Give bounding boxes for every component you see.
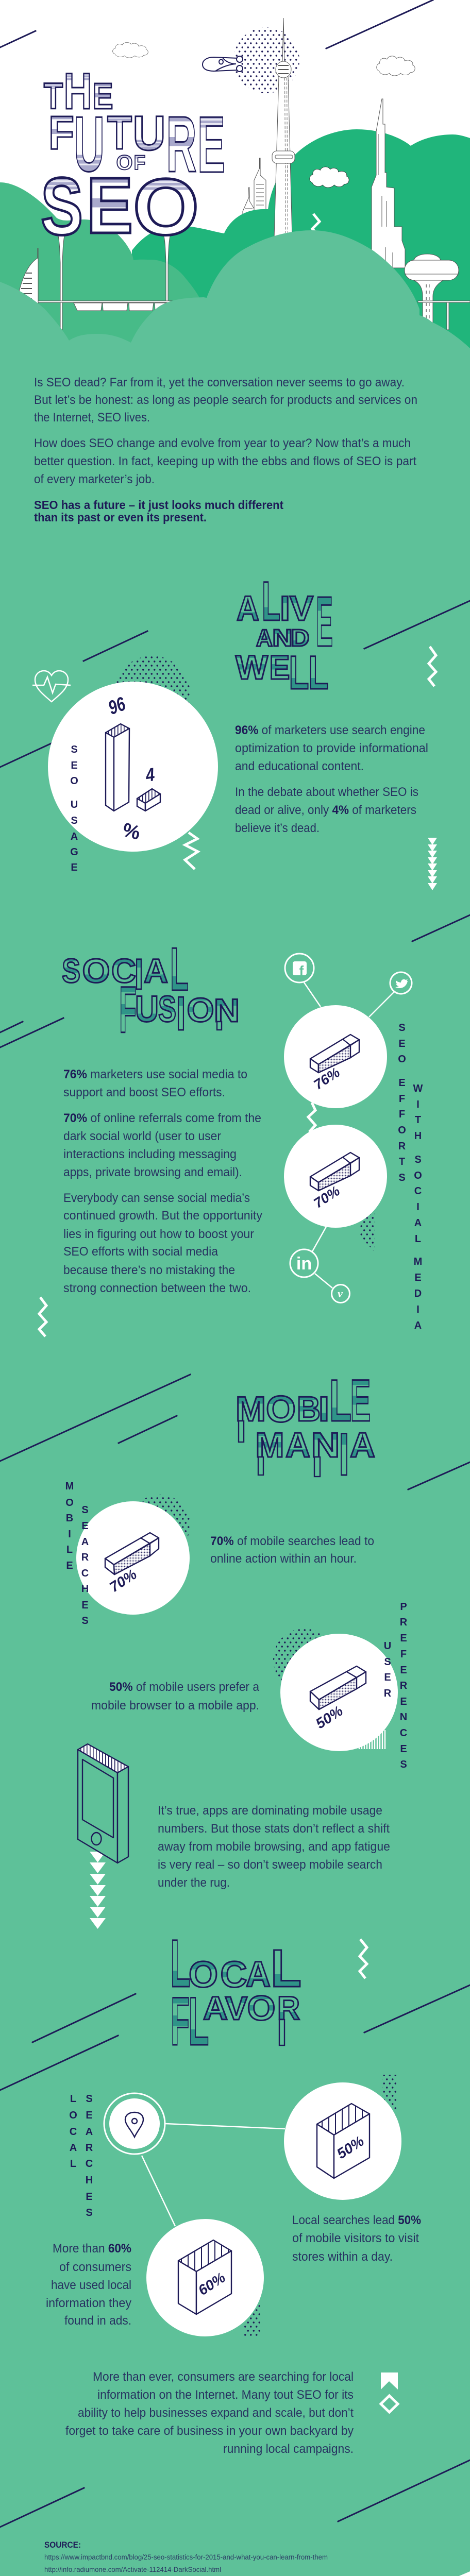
text: local 60 — [46, 2242, 131, 2328]
heading: mobile mania — [236, 1368, 375, 1488]
sources: https://www.impactbnd.com/blog/25-seo-statistics-for-2015-and-what-you-can-learn-from-them — [44, 2553, 328, 2561]
heading: alive and well: N — [272, 624, 293, 651]
heading: local flavor — [170, 1925, 301, 2060]
intro text: How does SEO change and evolve from year to year? Now that’s a much — [34, 436, 411, 450]
heading: mobile mania: B — [297, 1389, 321, 1429]
text: local closing — [65, 2370, 354, 2456]
icon: white cloud — [310, 167, 349, 188]
icon: facebook — [285, 954, 314, 982]
text: alive and well: and educational content. — [235, 759, 364, 773]
value 60%: 60% — [195, 2269, 228, 2298]
triangles — [90, 1852, 106, 1929]
heading: social fusion: S — [62, 952, 80, 990]
intro text: better question. In fact, keeping up with the ebbs and flows of SEO is part — [34, 454, 416, 468]
title: T — [107, 107, 132, 159]
intro text: But let’s be honest: as long as people search for products and services on — [34, 393, 417, 407]
icon: bag — [178, 2240, 231, 2314]
text: local closing: running local campaigns. — [223, 2442, 354, 2456]
hero sky lines — [0, 0, 470, 178]
text: mobile users: mobile browser to a mobile app. — [91, 1699, 259, 1713]
text: social: apps, private browsing and email). — [63, 1165, 242, 1179]
heading: mobile mania: E — [350, 1368, 371, 1434]
heading: local flavor: F — [171, 1984, 190, 2060]
text: local 50: stores within a day. — [292, 2250, 393, 2264]
number 4: 4 — [144, 764, 156, 786]
skyscraper — [372, 99, 405, 268]
zigzag — [429, 647, 436, 686]
dark green hills — [132, 129, 470, 371]
icon: vimeo: v — [338, 1287, 343, 1300]
text: social: strong connection between the two. — [63, 1281, 251, 1295]
value 76%: 76% — [311, 1064, 343, 1093]
text: local closing: information on the Internet. Many tout SEO for its — [97, 2388, 354, 2402]
heading: alive and well: D — [291, 624, 309, 651]
heading: local flavor: A — [203, 1990, 228, 2027]
heading: local flavor: R — [277, 1990, 300, 2027]
text: mobile users — [91, 1680, 260, 1713]
tower — [272, 18, 295, 238]
title: E — [197, 100, 225, 189]
heading: local flavor: A — [246, 1954, 271, 1994]
poles and bridge — [36, 233, 470, 330]
value 70%: 70% — [107, 1566, 140, 1595]
icon: box 50 — [310, 1666, 366, 1709]
heading: mobile mania: M — [236, 1389, 266, 1429]
heading: local flavor: O — [247, 1989, 275, 2028]
intro text: the Internet, SEO lives. — [34, 411, 150, 425]
icon: linkedin: in — [296, 1254, 312, 1274]
heading: alive and well: L — [289, 647, 309, 699]
dot pattern — [129, 1495, 190, 1555]
icon: facebook: f — [299, 963, 304, 978]
heading: alive and well: L — [262, 570, 280, 632]
decorative stripes — [359, 1730, 385, 1749]
title: E — [87, 161, 133, 250]
section lines: mobile — [0, 1375, 470, 1489]
connector lines — [304, 982, 394, 1288]
heading: social fusion — [62, 935, 240, 1047]
title: U — [133, 106, 166, 161]
zigzag — [312, 214, 320, 251]
saucer building — [405, 254, 459, 330]
icon: location pin — [104, 2093, 165, 2154]
value 50%: 50% — [313, 1703, 346, 1732]
chart: short bar 4 — [137, 789, 160, 811]
text: social: SEO efforts with social media — [63, 1245, 219, 1259]
heading: social fusion: F — [119, 973, 137, 1047]
text: alive and well: In the debate about whether SEO is — [235, 785, 418, 799]
section lines: social — [0, 1018, 63, 1047]
zigzag — [39, 1297, 46, 1336]
text: local closing: More than ever, consumers are searching for local — [93, 2370, 354, 2384]
label: SEO usage: SEO USAGE — [70, 744, 78, 873]
text: social: because there’s no mistaking the — [63, 1263, 235, 1277]
heading: mobile mania: I — [339, 1420, 349, 1488]
heading: social fusion: A — [144, 952, 168, 990]
zigzag — [185, 833, 198, 869]
label: searches: SEARCHES — [86, 2093, 93, 2218]
text: local 60: found in ads. — [64, 2314, 131, 2328]
intro text: than its past or even its present. — [34, 511, 207, 524]
icon: box 70 — [310, 1153, 359, 1191]
heading: alive and well: V — [290, 589, 313, 628]
heading: alive and well: W — [236, 648, 268, 686]
text: local 50: Local searches lead 50% — [292, 2213, 421, 2227]
text: local closing: ability to help businesses expand and scale, but don’t — [78, 2406, 354, 2420]
text: social: support and boost SEO efforts. — [63, 1086, 225, 1099]
icon: heart pulse — [32, 671, 71, 702]
dot pattern circle — [114, 656, 190, 732]
heading: social fusion: U — [135, 989, 159, 1030]
title: F — [134, 151, 145, 174]
text: alive and well: dead or alive, only 4% of marketers — [235, 803, 416, 817]
heading: social fusion: I — [176, 987, 186, 1040]
text: local 50 — [292, 2213, 421, 2264]
text: alive and well — [235, 723, 428, 835]
number 96: 96 — [106, 693, 129, 719]
text: mobile users: 50% of mobile users prefer a — [109, 1680, 260, 1694]
text: mobile searches — [210, 1534, 374, 1566]
heading: alive and well: I — [280, 589, 290, 628]
text: alive and well: 96% of marketers use search engine — [235, 723, 425, 737]
text: local 60: information they — [46, 2296, 131, 2310]
section lines: footer — [0, 2460, 470, 2527]
value 50%: 50% — [334, 2133, 367, 2162]
sources: http://info.radiumone.com/Activate-112414-DarkSocial.html — [44, 2566, 221, 2573]
text: social: 76% marketers use social media to — [63, 1067, 247, 1081]
infographic canvas: E — [316, 582, 333, 662]
title — [41, 62, 225, 252]
dot pattern — [382, 2075, 397, 2116]
title: F — [48, 107, 74, 159]
section lines: alive and well — [0, 601, 470, 941]
title: R — [166, 100, 197, 189]
title: O — [133, 162, 199, 251]
value 70%: 70% — [311, 1183, 343, 1211]
text: local 50: of mobile visitors to visit — [292, 2231, 419, 2245]
heading: mobile mania: M — [256, 1426, 284, 1465]
panel: 60% circle — [146, 2219, 264, 2336]
text: mobile searches: 70% of mobile searches lead to — [210, 1534, 374, 1548]
panel: mobile searches circle — [76, 1501, 190, 1615]
text: local 60: of consumers — [59, 2260, 131, 2274]
intro text: SEO has a future – it just looks much different — [34, 498, 283, 512]
icon: box 76 — [310, 1035, 359, 1073]
small skyline towers — [243, 158, 266, 216]
label: with social media: WITH SOCIAL MEDIA — [413, 1083, 423, 1331]
text: mobile apps: It’s true, apps are dominating mobile usage — [158, 1804, 382, 1818]
icon: phone — [78, 1744, 128, 1863]
intro text: Is SEO dead? Far from it, yet the conversation never seems to go away. — [34, 376, 405, 389]
heading: social fusion: L — [170, 935, 189, 1004]
heading: alive and well: A — [237, 589, 259, 628]
label: searches: SEARCHES — [81, 1504, 89, 1626]
text: mobile apps: under the rug. — [158, 1876, 230, 1890]
text: social: dark social world (user to user — [63, 1129, 221, 1143]
heading: local flavor: L — [170, 1925, 191, 2001]
left sail tower — [17, 248, 38, 309]
label: local: LOCAL — [69, 2093, 77, 2170]
dot pattern — [273, 1629, 335, 1690]
heading: local flavor: L — [189, 1984, 209, 2060]
icon: box 70 — [105, 1533, 159, 1574]
title: U — [74, 100, 105, 188]
heading: social fusion: S — [158, 989, 176, 1030]
heading: alive and well — [236, 570, 333, 699]
heading: social fusion: C — [111, 952, 136, 990]
heading: mobile mania: O — [266, 1389, 296, 1430]
title: E — [93, 76, 113, 117]
text: social: interactions including messaging — [63, 1147, 237, 1161]
text: social: Everybody can sense social media’s — [63, 1191, 250, 1205]
zigzag — [360, 1939, 367, 1978]
panel: 50% circle — [284, 2082, 401, 2200]
text: local 60: have used local — [51, 2278, 131, 2292]
text: alive and well: optimization to provide informational — [235, 741, 428, 755]
panel: 70% circle — [284, 1125, 387, 1228]
heading: social fusion: O — [82, 952, 110, 990]
heading: alive and well: L — [308, 647, 329, 699]
title: T — [44, 76, 63, 117]
text: local closing: forget to take care of business in your own backyard by — [65, 2424, 354, 2438]
intro text — [34, 376, 417, 524]
dot pattern — [360, 1209, 375, 1252]
heading: mobile mania: N — [311, 1426, 340, 1465]
icon: bookmark and diamond — [381, 2372, 398, 2412]
text: social: continued growth. But the opportunity — [63, 1209, 262, 1223]
label: mobile: MOBILE — [65, 1481, 74, 1571]
label: SEO efforts: SEO EFFORTS — [398, 1022, 406, 1183]
text: mobile searches: online action within an hour. — [210, 1552, 357, 1566]
text: mobile apps: numbers. But those stats don’t reflect a shift — [158, 1822, 390, 1836]
connector lines — [142, 2124, 285, 2226]
heading: local flavor: O — [189, 1955, 218, 1995]
chart: tall bar 96 — [106, 724, 129, 811]
text: social — [63, 1067, 262, 1295]
text: mobile apps — [158, 1804, 390, 1890]
heading: local flavor: V — [225, 1990, 247, 2027]
title: S — [41, 161, 83, 252]
heading: alive and well: E — [269, 648, 290, 686]
text: mobile apps: away from mobile browsing, and app fatigue — [158, 1840, 390, 1854]
heading: social fusion: O — [187, 991, 214, 1029]
icon: vimeo — [332, 1285, 349, 1302]
icon: bag — [317, 2104, 370, 2178]
text: social: lies in figuring out how to boost your — [63, 1227, 254, 1241]
zigzag — [308, 1103, 315, 1132]
icon: linkedin — [290, 1249, 318, 1277]
title: H — [64, 62, 92, 120]
icon: spaceship — [203, 56, 243, 72]
panel: user preferences circle — [280, 1634, 398, 1751]
icon: twitter — [390, 972, 412, 994]
text: social: 70% of online referrals come from the — [63, 1111, 261, 1125]
title: O — [116, 151, 133, 174]
dot pattern — [244, 2300, 260, 2336]
label: preferences: PREFERENCES — [400, 1601, 408, 1770]
heading: local flavor: C — [221, 1955, 247, 1995]
mid green hills — [0, 182, 199, 361]
heading: local flavor: L — [271, 1939, 301, 1998]
section lines: local — [0, 1985, 470, 2090]
heading: mobile mania: A — [350, 1426, 375, 1465]
triangles — [428, 838, 437, 890]
heading: alive and well: A — [256, 624, 273, 651]
heading: mobile mania: I — [318, 1389, 329, 1429]
heading: social fusion: N — [214, 993, 240, 1029]
text: local 60: More than 60% — [53, 2242, 131, 2256]
text: alive and well: believe it’s dead. — [235, 821, 320, 835]
label: user: USER — [384, 1640, 392, 1699]
panel: 76% circle — [284, 1005, 387, 1108]
text: mobile apps: is very real – so don’t sweep mobile search — [158, 1858, 382, 1872]
heading: mobile mania: L — [329, 1368, 351, 1434]
heading: social fusion: I — [135, 950, 143, 998]
panel: SEO usage circle — [48, 682, 218, 852]
hero dot pattern circle — [233, 27, 299, 93]
heading: mobile mania: A — [286, 1426, 310, 1465]
sources — [44, 2540, 342, 2576]
intro text: of every marketer’s job. — [34, 472, 155, 486]
sources: SOURCE: — [44, 2540, 81, 2550]
percent sign: % — [120, 819, 142, 844]
icon: clouds — [113, 42, 415, 76]
